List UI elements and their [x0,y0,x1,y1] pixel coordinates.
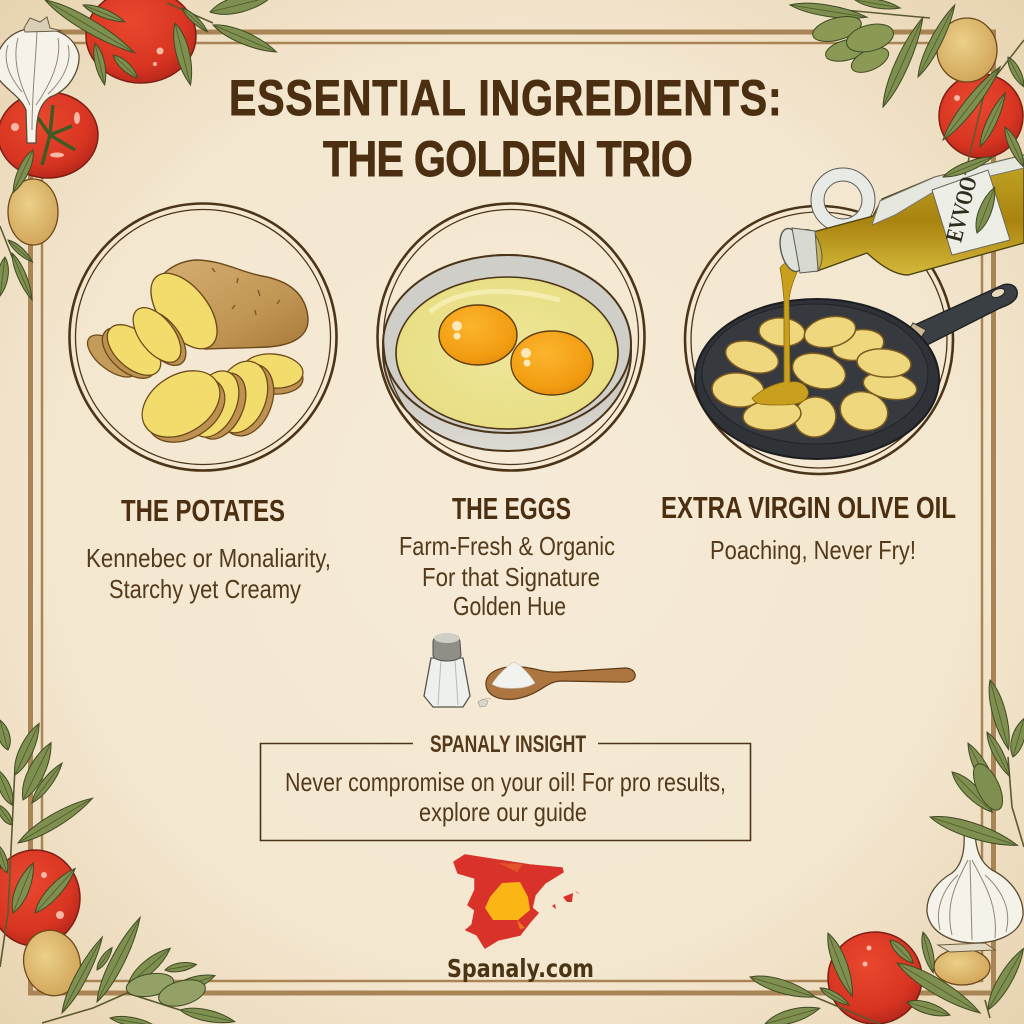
decoration: top-right corner [789,0,1024,235]
potato [8,179,58,245]
icon: salt shaker [424,633,470,707]
eggs circle frame [378,204,644,470]
olive branch [789,0,1024,235]
garlic [927,833,1023,952]
decoration: bottom-left corner [0,719,236,1024]
potatoes description: Starchy yet Creamy [109,574,301,604]
eggs description [399,531,615,621]
decoration: bottom-right corner [748,678,1024,1024]
eggs heading: THE EGGS [452,491,571,526]
callout: Spanaly insight [260,731,750,840]
whole cut potato [138,260,308,360]
callout text [285,767,726,827]
bottle label: EVVOO [942,174,983,244]
icon: wooden spoon with salt [478,662,635,707]
tomato [86,0,196,83]
potato slices in pan [711,312,919,443]
potato [934,949,990,985]
title: THE GOLDEN TRIO [323,131,693,187]
potato slices [81,299,304,456]
title: ESSENTIAL INGREDIENTS: [229,70,782,126]
tomato [828,932,922,1024]
oil description: Poaching, Never Fry! [710,535,916,565]
callout heading: SPANALY INSIGHT [430,731,586,758]
olive oil bottle [776,155,1024,275]
panel: potatoes [70,204,336,604]
eggs description: Farm-Fresh & Organic [399,531,615,561]
olive branches [748,678,1024,1024]
tomato with calyx [0,92,98,178]
potatoes description [86,543,331,604]
potatoes heading: THE POTATES [121,493,285,528]
oil circle frame [685,206,953,474]
tomato [939,74,1023,158]
title [229,70,782,187]
garlic [0,17,79,143]
potato [16,924,88,1002]
olive branch leaves [0,0,279,302]
bowl with eggs [383,255,631,451]
icon: map of Spain [454,855,580,948]
panel: olive oil [661,155,1024,565]
potatoes description: Kennebec or Monaliarity, [86,543,331,573]
frying pan [695,284,1017,459]
brand: Spanaly.com: Spanaly.com [447,954,594,983]
potato circle frame [70,204,336,470]
olive branches [0,719,236,1024]
eggs description: For that Signature [422,562,600,592]
callout text: explore our guide [419,797,587,827]
bottle label [932,170,1010,255]
oil stream and pool [752,262,808,405]
tomato [0,850,80,946]
eggs description: Golden Hue [453,591,566,621]
panel: eggs [378,204,644,621]
potato [937,18,997,82]
decoration: top-left corner [0,0,279,302]
callout text: Never compromise on your oil! For pro results, [285,767,726,797]
